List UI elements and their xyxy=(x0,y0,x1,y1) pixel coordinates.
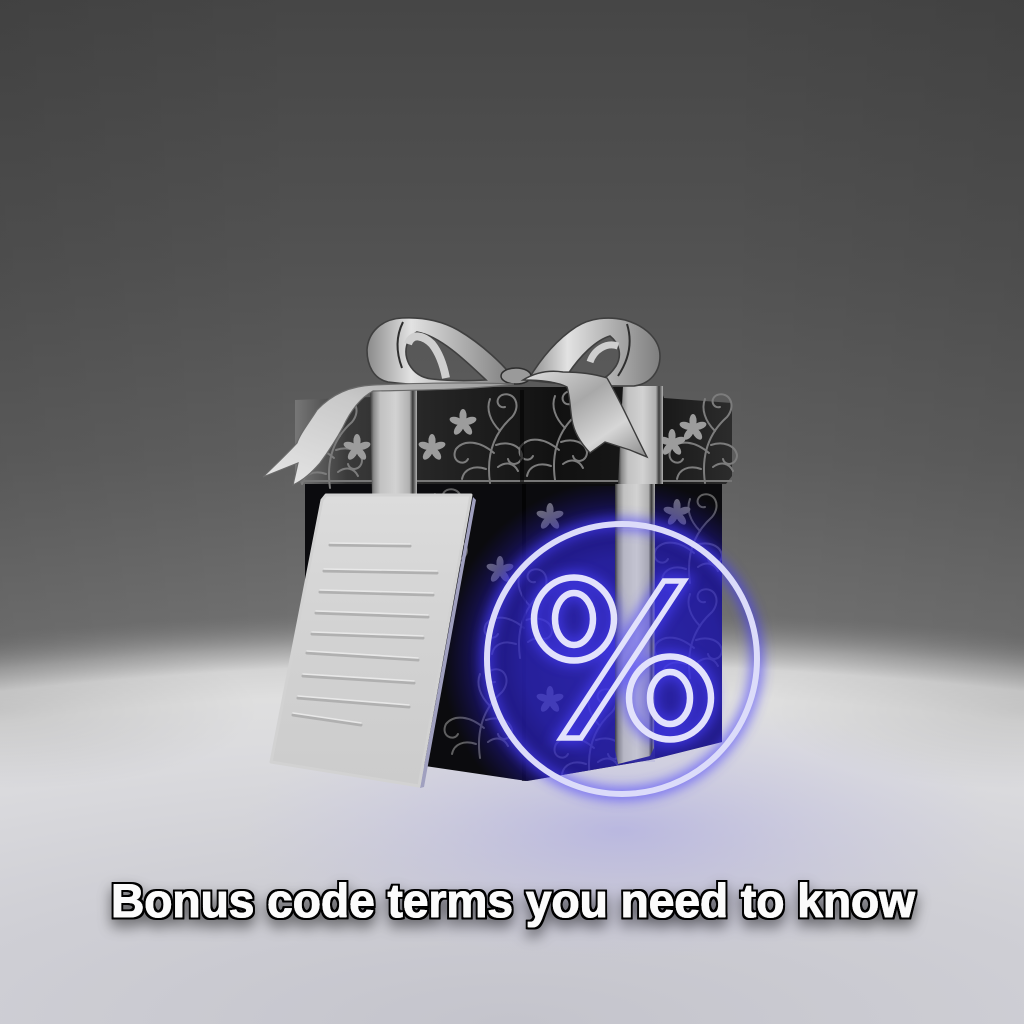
neon percent badge xyxy=(487,524,757,794)
right loop highlights xyxy=(590,324,630,376)
bow left loop xyxy=(367,318,514,386)
ribbon tail right xyxy=(523,371,647,457)
gift box xyxy=(263,318,737,790)
floor xyxy=(0,590,1024,1024)
box body xyxy=(305,484,730,790)
lid ribbons xyxy=(370,386,663,496)
badge ring xyxy=(487,524,757,794)
document sheet xyxy=(271,495,476,788)
sheet edge xyxy=(420,497,476,788)
lid xyxy=(295,387,737,488)
sheet text lines xyxy=(293,543,437,725)
body ribbon xyxy=(615,484,655,764)
bow right loop xyxy=(528,318,660,386)
neon glow xyxy=(487,524,757,794)
left loop highlights xyxy=(398,322,446,378)
percent sign xyxy=(534,578,711,740)
ribbon tail left xyxy=(263,383,514,485)
sheet face xyxy=(271,495,471,786)
title: Bonus code terms you need to know xyxy=(111,874,915,927)
bow knot xyxy=(501,368,531,384)
